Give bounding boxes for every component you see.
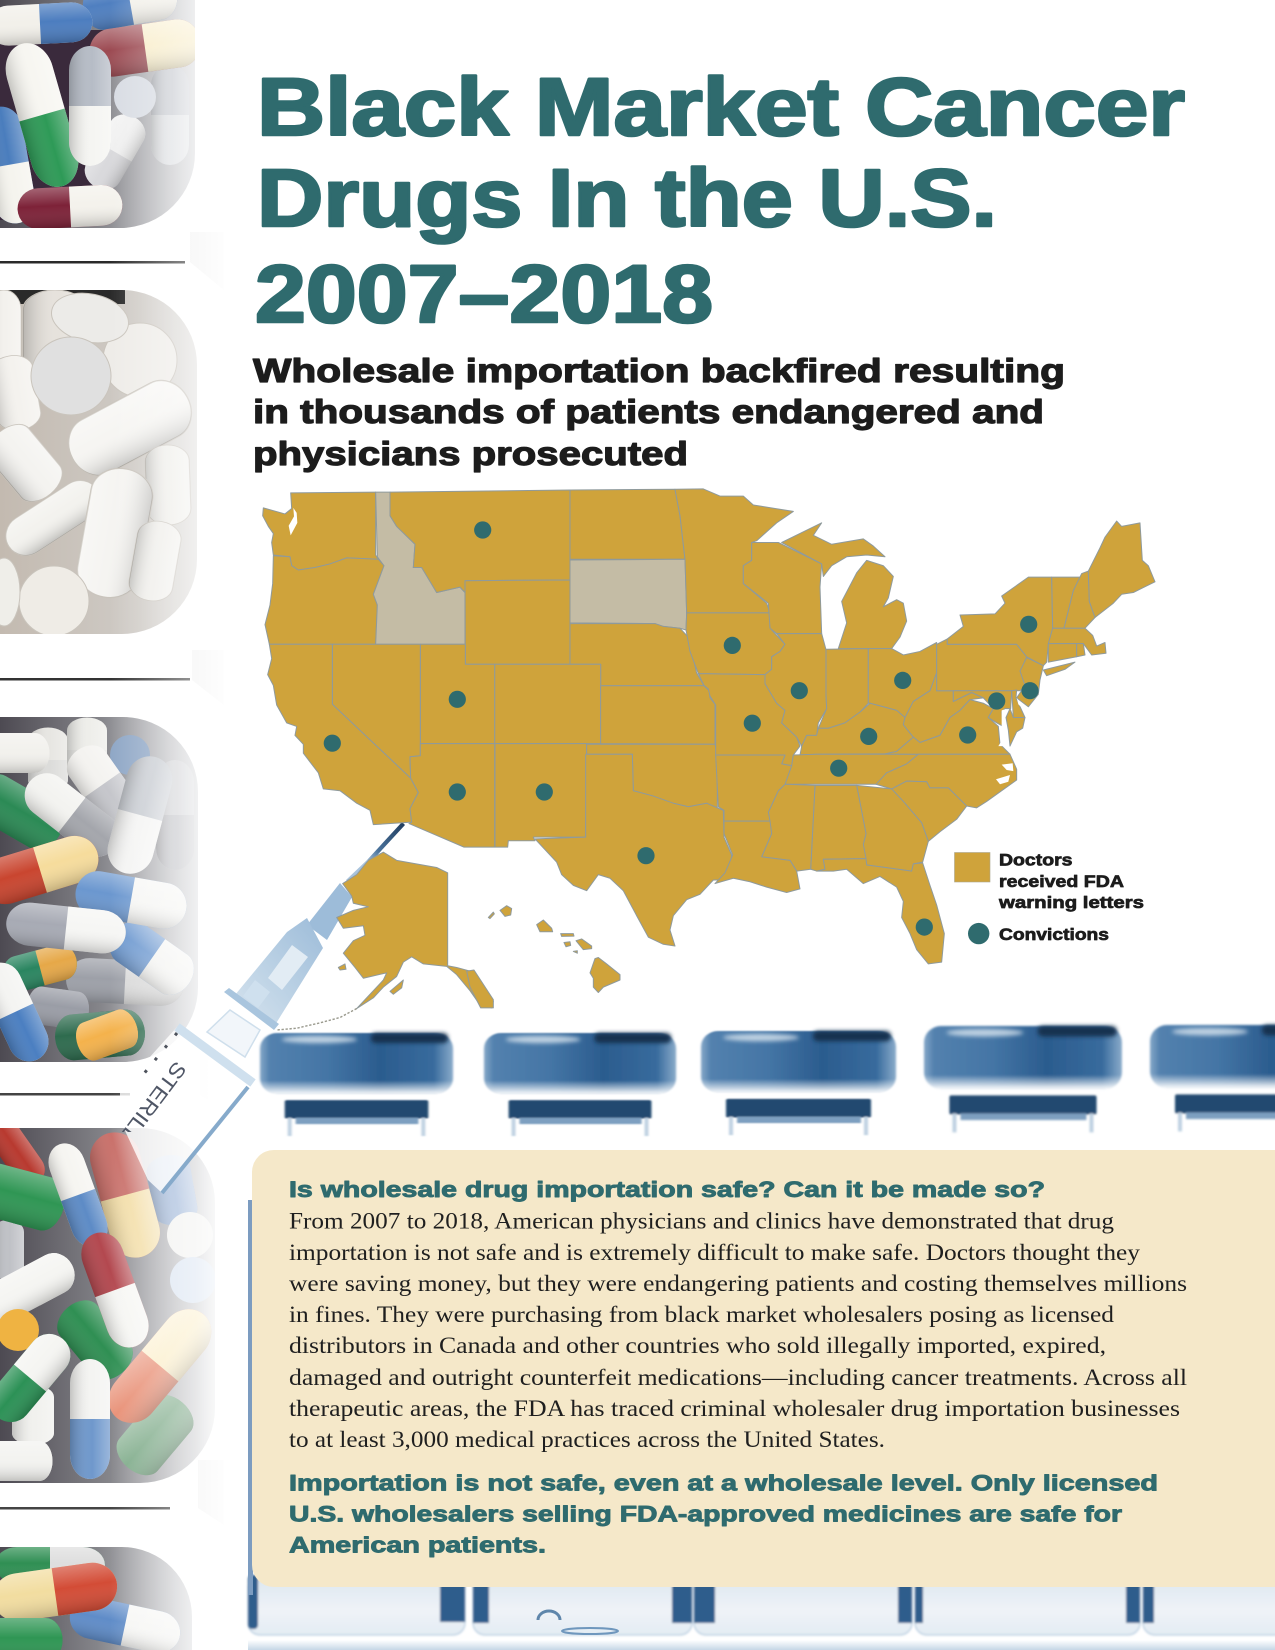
vial caps row xyxy=(260,1025,1275,1136)
vial bases row xyxy=(240,1200,1275,1650)
subtitle: physicians prosecuted xyxy=(253,435,688,472)
legend: warning letters label: received FDA xyxy=(999,873,1124,891)
panel body text: distributors in Canada and other countries who sold illegally imported, expired, xyxy=(289,1333,1106,1359)
title: 2007–2018 xyxy=(255,249,713,340)
panel body text: From 2007 to 2018, American physicians and clinics have demonstrated that drug xyxy=(289,1208,1114,1234)
panel conclusion: American patients. xyxy=(289,1533,546,1558)
pill tray column xyxy=(0,0,225,1650)
tray 2: white tablets xyxy=(0,286,201,640)
panel body text xyxy=(289,1208,1188,1453)
legend: warning letters label xyxy=(998,852,1144,912)
eastern states xyxy=(675,489,1155,964)
panel body text: were saving money, but they were endangering patients and costing themselves millions xyxy=(289,1271,1187,1297)
panel body text: to at least 3,000 medical practices across the United States. xyxy=(289,1427,885,1453)
tray 5: coloured capsules xyxy=(0,1547,195,1650)
title: Black Market Cancer xyxy=(257,62,1185,153)
panel body text: in fines. They were purchasing from black market wholesalers posing as licensed xyxy=(289,1302,1114,1328)
syringe xyxy=(113,822,405,1193)
legend: warning letters label: Doctors xyxy=(999,852,1072,870)
conviction markers xyxy=(324,521,1039,936)
map legend xyxy=(954,852,1144,944)
title: Drugs In the U.S. xyxy=(257,153,997,244)
map of U.S. states xyxy=(263,489,1155,1030)
legend: convictions label: Convictions xyxy=(999,926,1109,944)
text panel xyxy=(252,1150,1275,1587)
tray 3: coloured capsules xyxy=(0,717,202,1068)
subtitle: Wholesale importation backfired resulting xyxy=(253,352,1065,389)
legend: warning letters swatch xyxy=(954,852,990,882)
panel heading: Is wholesale drug importation safe? Can it be made so? xyxy=(289,1177,1045,1202)
western states xyxy=(263,489,732,1030)
Alaska xyxy=(277,852,493,1030)
subtitle xyxy=(253,352,1065,472)
panel conclusion: U.S. wholesalers selling FDA-approved medicines are safe for xyxy=(289,1502,1123,1527)
panel body text: therapeutic areas, the FDA has traced criminal wholesaler drug importation businesses xyxy=(289,1396,1180,1422)
tray 4: coloured capsules xyxy=(0,1108,222,1488)
Hawaii xyxy=(488,906,620,992)
subtitle: in thousands of patients endangered and xyxy=(253,393,1044,430)
legend: warning letters label: warning letters xyxy=(998,894,1144,912)
title xyxy=(255,62,1185,340)
tray 1: coloured capsules xyxy=(0,0,204,230)
panel body text: importation is not safe and is extremely difficult to make safe. Doctors thought they xyxy=(289,1240,1140,1266)
panel body text: damaged and outright counterfeit medications—including cancer treatments. Across all xyxy=(289,1365,1188,1391)
panel conclusion xyxy=(289,1470,1158,1558)
syringe: STERILE xyxy=(113,1057,190,1149)
panel conclusion: Importation is not safe, even at a wholesale level. Only licensed xyxy=(289,1470,1158,1496)
legend: convictions swatch xyxy=(968,923,989,944)
